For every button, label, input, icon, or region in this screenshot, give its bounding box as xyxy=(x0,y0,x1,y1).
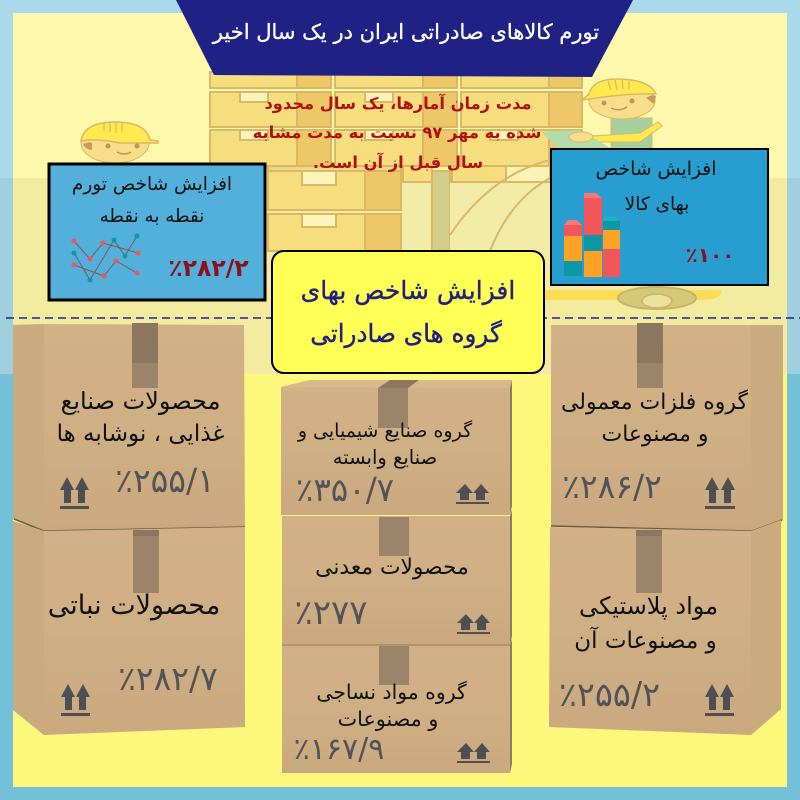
box: plastics xyxy=(549,520,781,735)
warehouse shelves illustration xyxy=(210,72,582,251)
box: plant products: ٪۲۸۲/۷ xyxy=(118,659,218,698)
central heading: گروه های صادراتی xyxy=(310,319,502,348)
icon: stacked bars xyxy=(564,193,620,277)
panel: commodity price index: افزایش شاخص xyxy=(596,159,716,180)
box: plastics: مواد پلاستیکی xyxy=(579,592,718,620)
box: chemicals: گروه صنایع شیمیایی و xyxy=(297,419,473,442)
box: chemicals: صنایع وابسته xyxy=(333,446,437,469)
box: food industries: ٪۲۵۵/۱ xyxy=(115,461,215,500)
panel: commodity price index: ٪۱۰۰ xyxy=(686,243,734,267)
illustration: worker right xyxy=(541,79,662,149)
illustration: worker left xyxy=(81,122,158,165)
note text: سال قبل از آن است. xyxy=(313,152,483,172)
box: minerals: ٪۲۷۷ xyxy=(294,593,368,633)
icon: line chart xyxy=(72,234,140,282)
box: textiles xyxy=(282,639,512,773)
box: textiles: ٪۱۶۷/۹ xyxy=(294,732,384,767)
title banner: تورم کالاهای صادراتی ایران در یک سال اخیر xyxy=(212,20,599,44)
forklift wheel and base xyxy=(544,287,722,309)
box: chemicals xyxy=(281,380,512,515)
box: minerals: محصولات معدنی xyxy=(315,555,469,580)
box: food industries: محصولات صنایع xyxy=(61,387,220,415)
panel: point-to-point inflation: ٪۲۸۲/۲ xyxy=(168,254,249,282)
panel: commodity price index: بهای کالا xyxy=(625,194,689,215)
box: textiles: و مصنوعات xyxy=(338,707,438,731)
box: food industries: غذایی ، نوشابه ها xyxy=(57,421,224,447)
panel: commodity price index xyxy=(551,149,768,285)
box: base metals: ٪۲۸۶/۲ xyxy=(562,467,662,506)
box: plant products xyxy=(13,521,245,735)
panel: point-to-point inflation xyxy=(49,164,265,300)
central heading: افزایش شاخص بهای xyxy=(301,276,515,306)
title banner xyxy=(176,0,633,77)
box: chemicals: ٪۳۵۰/۷ xyxy=(296,471,394,509)
box: plant products: محصولات نباتی xyxy=(48,590,220,621)
box: plastics: و مصنوعات آن xyxy=(574,626,717,654)
box: base metals xyxy=(551,323,783,531)
note text xyxy=(253,93,541,172)
box: plastics: ٪۲۵۵/۲ xyxy=(559,675,660,714)
box: base metals: و مصنوعات xyxy=(601,422,709,447)
central heading xyxy=(272,251,544,373)
dashed divider xyxy=(6,317,800,319)
box: minerals xyxy=(282,510,512,645)
box: food industries xyxy=(13,323,245,531)
box: textiles: گروه مواد نساجی xyxy=(316,680,467,704)
panel: point-to-point inflation: افزایش شاخص تورم xyxy=(72,174,232,195)
panel: point-to-point inflation: نقطه به نقطه xyxy=(100,206,204,227)
note text: مدت زمان آمارها، یک سال محدود xyxy=(264,93,532,113)
box: base metals: گروه فلزات معمولی xyxy=(561,389,749,415)
note text: شده به مهر ۹۷ نسبت به مدت مشابه xyxy=(253,123,541,142)
